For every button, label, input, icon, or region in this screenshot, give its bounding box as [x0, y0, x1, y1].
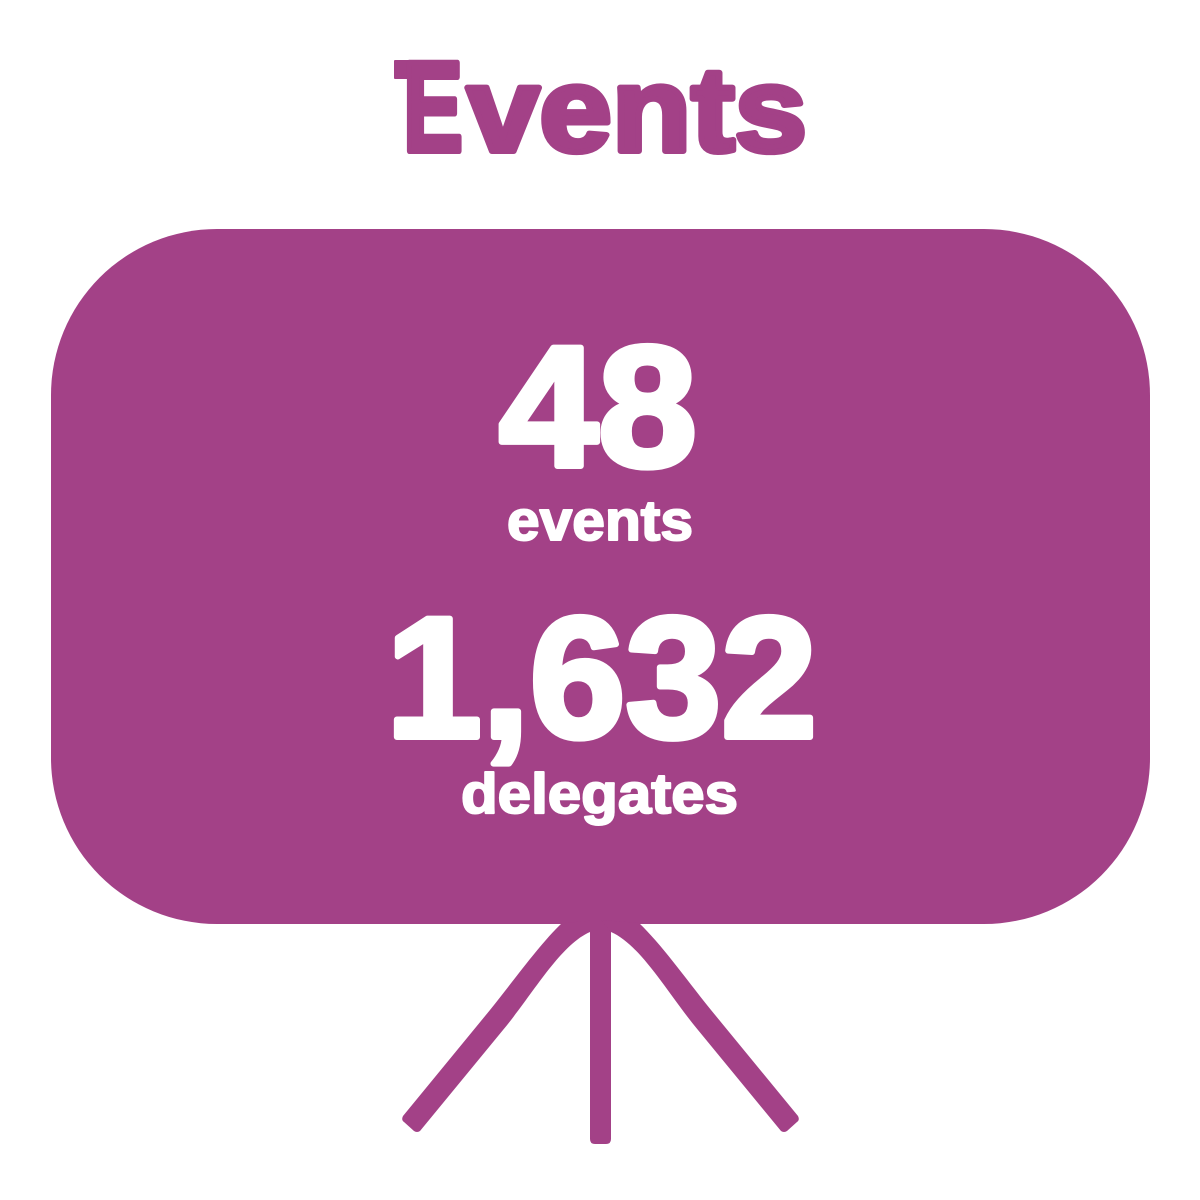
stat: 1,632: 1,632 [386, 582, 817, 774]
stat: 48: 48 [499, 311, 697, 503]
title initial serif [395, 61, 415, 78]
title initial: E [403, 36, 463, 179]
right leg [601, 920, 799, 1132]
centre leg [590, 920, 611, 1144]
panel: presentation board [51, 229, 1150, 924]
left leg [402, 920, 600, 1132]
title remainder: vents [467, 43, 807, 177]
label: delegates: delegates [461, 762, 738, 826]
icon: easel legs [402, 920, 799, 1144]
title [395, 36, 807, 179]
label: events: events [507, 489, 693, 553]
